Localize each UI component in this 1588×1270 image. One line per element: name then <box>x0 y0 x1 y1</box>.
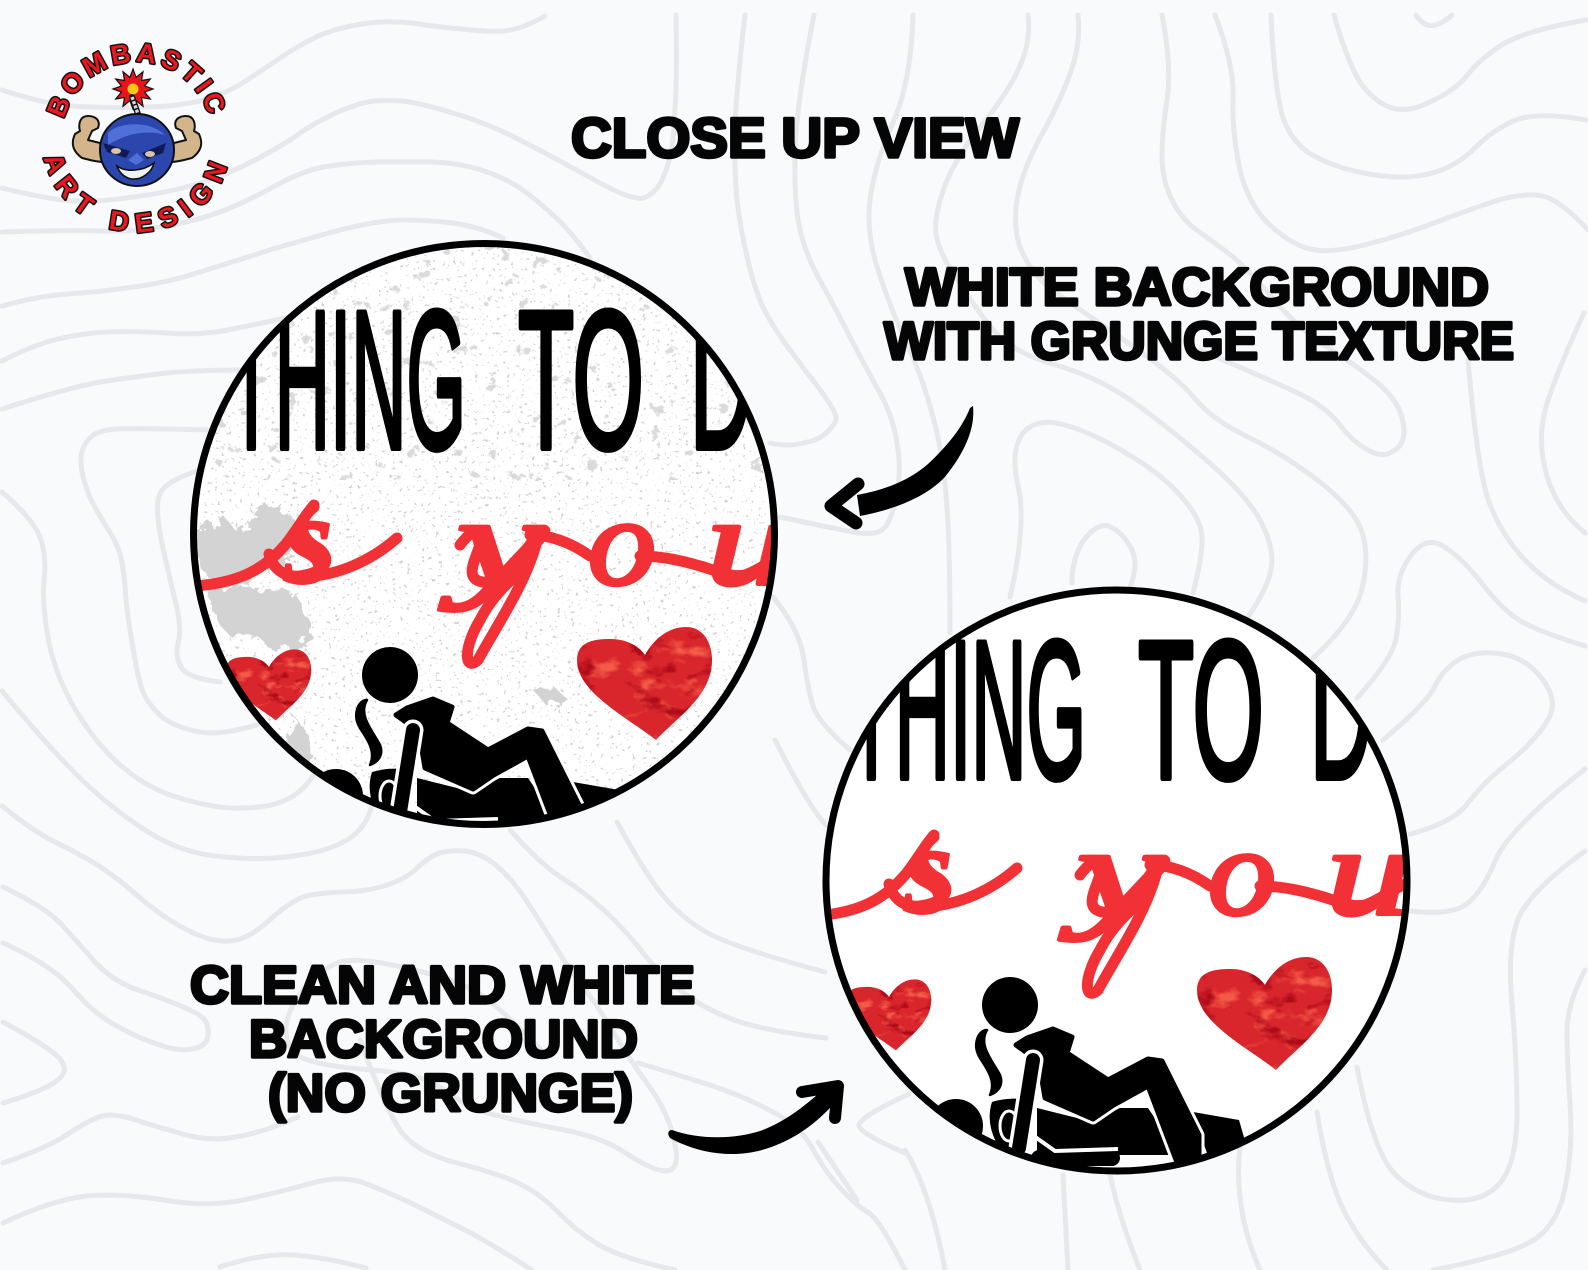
artwork script text: s you: o <box>1208 804 1276 942</box>
heart illustrations <box>226 627 712 740</box>
artwork script text: s you <box>830 830 1404 999</box>
arrow: to grunge circle <box>831 406 973 523</box>
artwork script text: s you <box>200 500 771 669</box>
artwork script text: s you: s <box>903 802 952 940</box>
callout: grunge background label: WITH GRUNGE TEXTURE <box>884 312 1514 371</box>
icon: flexing arms <box>73 116 201 162</box>
text: DO <box>690 270 820 490</box>
stick figures <box>324 647 616 821</box>
artwork text: thing to do: THING <box>848 600 1086 820</box>
heart illustrations <box>846 957 1332 1070</box>
title: CLOSE UP VIEW <box>571 106 1019 169</box>
artwork text: thing to do <box>246 308 746 453</box>
callout: clean background label: BACKGROUND <box>249 1010 638 1069</box>
icon: angry blue bomb <box>100 114 174 186</box>
artwork text: thing to do: TO <box>1138 600 1264 820</box>
stick figures <box>929 977 1409 1165</box>
artwork text: thing to do: TO <box>518 270 644 490</box>
artwork script text: s you: y <box>1059 804 1168 942</box>
grunge texture <box>190 240 778 828</box>
artwork script text: s you: u <box>1326 804 1411 942</box>
panel: circle with clean background <box>815 590 1440 1172</box>
artwork script text: s you: o <box>588 474 656 612</box>
callout: grunge background label: WHITE BACKGROUND <box>905 258 1489 317</box>
artwork script text: s you: s <box>283 472 332 610</box>
artwork text: thing to do: THING <box>228 270 466 490</box>
callout: clean background label <box>190 956 695 1123</box>
artwork script text: s you: u <box>706 474 791 612</box>
artwork text: thing to do <box>866 638 1368 783</box>
callout: clean background label: CLEAN AND WHITE <box>190 956 695 1015</box>
callout: clean background label: (NO GRUNGE) <box>268 1064 633 1123</box>
callout: grunge background label <box>884 258 1514 371</box>
icon: explosion spark <box>113 69 153 114</box>
logo arc text: top: BOMBASTIC <box>45 42 226 119</box>
panel: circle with grunge texture <box>190 240 820 835</box>
logo arc text: bottom: ART DESIGN <box>42 156 228 234</box>
arrow: to clean circle <box>668 1086 838 1154</box>
logo: Bombastic Art Design <box>42 42 228 234</box>
artwork script text: s you: y <box>439 474 548 612</box>
